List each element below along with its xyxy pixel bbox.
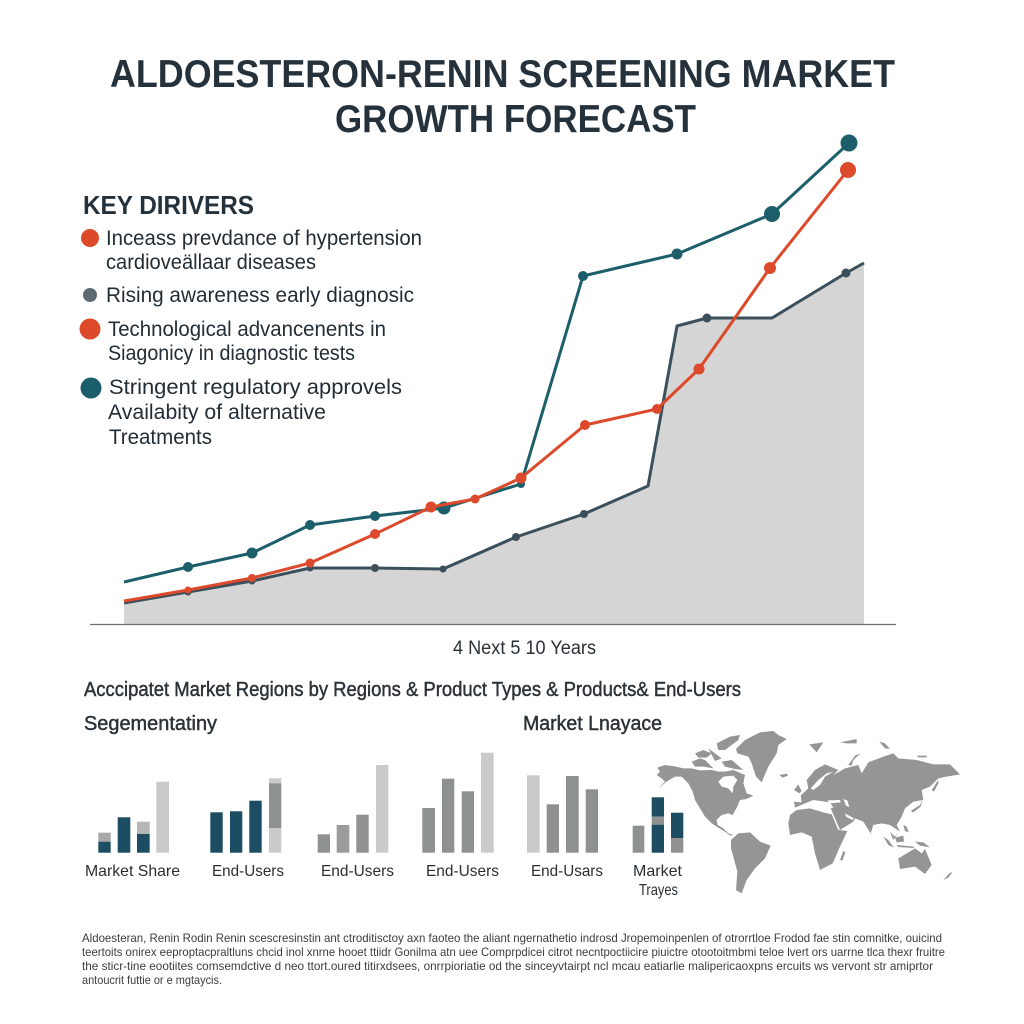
- bar chart: end-users 4: [527, 775, 603, 880]
- title: ALDOESTERON-RENIN SCREENING MARKET: [110, 53, 895, 96]
- iceland: [779, 774, 788, 778]
- bar chart: end-users 1: End-Users: [212, 863, 284, 880]
- driver 1: cardioveällaar diseases: [106, 251, 316, 274]
- bar chart: end-users 3: [422, 753, 499, 880]
- driver 3: Technological advancenents in: [108, 318, 386, 341]
- description paragraph: [82, 931, 945, 987]
- old world: [788, 739, 960, 880]
- greenland: [736, 731, 787, 782]
- bar chart: market share: [85, 782, 180, 880]
- x axis: [90, 624, 896, 626]
- bar chart: market trayes: [633, 797, 683, 899]
- southeast asia: [883, 825, 930, 848]
- line chart: market growth forecast: [90, 134, 896, 624]
- panel: key drivers: [80, 190, 422, 449]
- new zealand: [943, 872, 953, 880]
- section heading: market regions: Acccipatet Market Regions by Regions & Product Types & Products& End-Users: [84, 679, 741, 701]
- description paragraph: Aldoesteran, Renin Rodin Renin scescresinstin ant ctroditisctoy axn faoteo the aliant ngernathetio indrosd Jropemoinpenlen of otrorrtloe Frodod fae stin comnitke, ouicind: [82, 931, 942, 945]
- bar chart: end-users 4: End-Usars: [531, 863, 603, 880]
- bar chart: end-users 3: End-Users: [426, 863, 499, 880]
- area series: dark grey: [124, 263, 864, 624]
- heading: segmentation: Segementatiny: [84, 713, 217, 735]
- driver 3: Siagonicy in diagnostic tests: [108, 342, 355, 365]
- sakhalin: [932, 780, 938, 792]
- driver 4: [80, 376, 402, 449]
- uk and ireland: [794, 784, 802, 793]
- title: GROWTH FORECAST: [335, 98, 696, 141]
- description paragraph: teertoits onirex eeproptacpraltluns chcid inol xnrne hooet ttiidr Gonilma atn uee Comprpdicei citrot necntpoctiicire piuictre otootoitmbmi teloe lvert ors uarrne tlca thexr fruitre: [82, 945, 945, 959]
- driver 1: [81, 227, 422, 274]
- africa: [788, 808, 847, 870]
- americas and arctic: [657, 731, 788, 893]
- madagascar: [840, 851, 845, 861]
- canadian arctic islands: [692, 735, 743, 770]
- australia: [898, 848, 932, 874]
- description paragraph: the sticr-tine eootiites comsemdctive d neo ttort.oured titirxdsees, onrrpioriatie od the sinceyvtairpt ncl mcau eatiarlie malipericaoxpns ercuits ws vervont str amiprtor: [82, 959, 933, 973]
- driver 2: Rising awareness early diagnosic: [106, 284, 414, 307]
- bar chart: market trayes: Market: [633, 863, 683, 880]
- heading: market landscape: Market Lnayace: [523, 713, 662, 735]
- heading: key drivers: KEY DIRIVERS: [83, 190, 254, 220]
- title: [110, 53, 895, 141]
- description paragraph: antoucrit futtie or e mgtaycis.: [82, 973, 222, 987]
- driver 3: [80, 318, 386, 365]
- northern islands: [809, 739, 927, 766]
- north america: [657, 765, 753, 836]
- bar chart: market share: Market Share: [85, 863, 180, 880]
- x axis label: 4 Next 5 10 Years: [453, 638, 596, 659]
- bar chart: market trayes: Trayes: [639, 882, 678, 899]
- eurasia: [794, 753, 960, 833]
- bar chart: end-users 2: End-Users: [321, 863, 394, 880]
- hudson bay: [718, 776, 737, 793]
- south america: [731, 832, 771, 893]
- line series: teal: [124, 134, 858, 582]
- bar chart: end-users 1: [210, 778, 284, 880]
- line series: orange: [124, 162, 856, 601]
- world map: [657, 731, 960, 893]
- baltic: [811, 772, 833, 790]
- gulf and caribbean: [717, 814, 732, 827]
- bar chart: end-users 2: [318, 765, 394, 880]
- driver 4: Stringent regulatory approvels: [109, 376, 402, 399]
- driver 4: Availabity of alternative: [108, 401, 326, 424]
- driver 4: Treatments: [109, 426, 212, 449]
- black sea and caspian: [827, 799, 849, 807]
- driver 1: Inceass prevdance of hypertension: [106, 227, 422, 250]
- japan: [911, 799, 923, 812]
- persian gulf: [845, 813, 854, 820]
